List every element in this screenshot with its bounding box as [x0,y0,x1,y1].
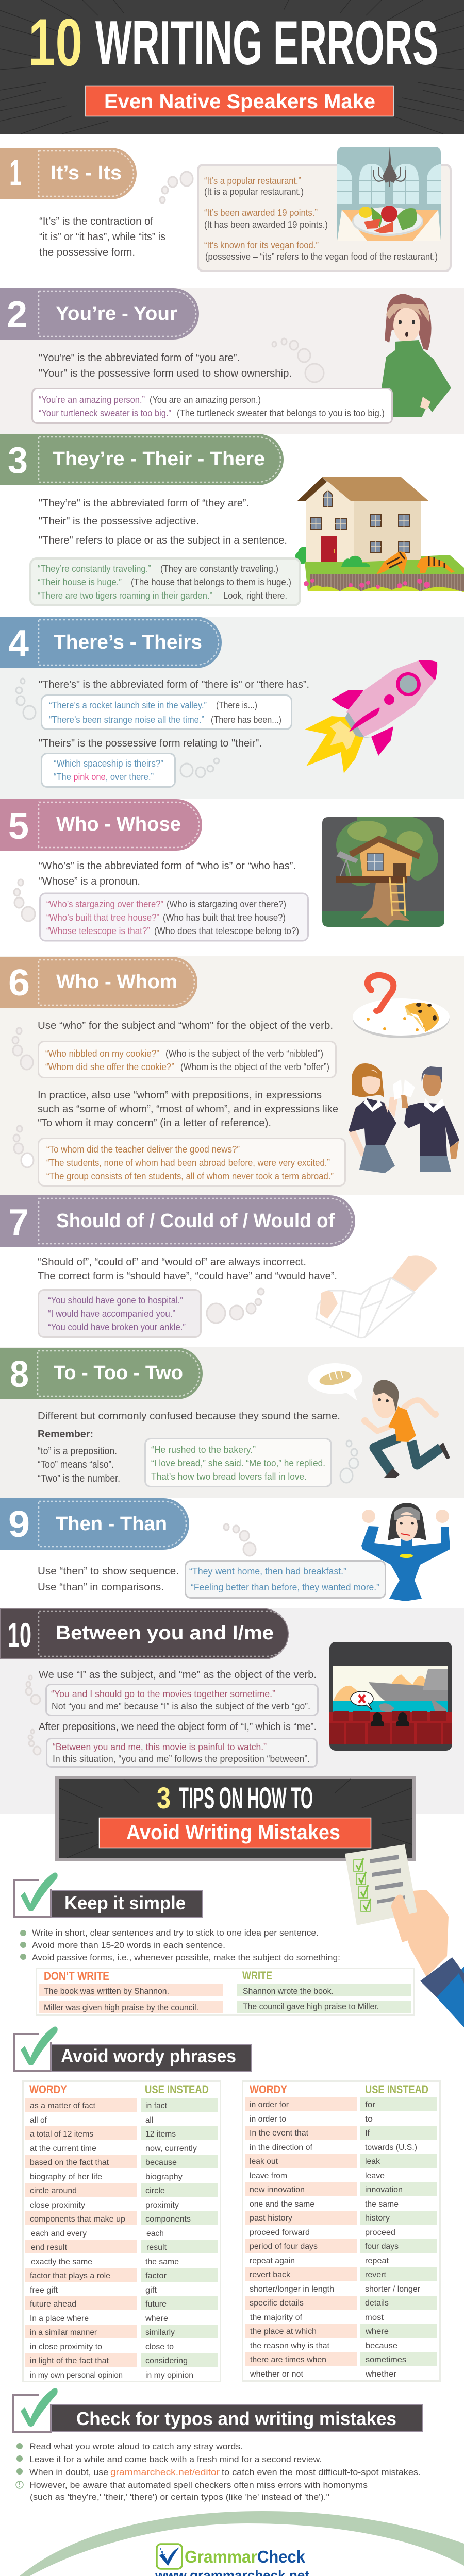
example box: “Your turtleneck sweater is too big.” [39,408,171,418]
example box 2: “The group consists of ten students, all of whom never took a term abroad.” [46,1171,334,1181]
example box: there's: “There’s been strange noise all the time.” [49,715,204,725]
explanation text [39,498,287,546]
bullet list: Avoid more than 15-20 words in each sentence. [32,1940,225,1950]
tag: 5 Who - Whose [0,799,202,851]
subtitle banner [86,86,393,116]
example box: “They went home, then had breakfast.” [189,1566,346,1577]
table: wordy phrases left: a total of 12 items [30,2130,93,2139]
example box 1: “You and I should go to the movies together sometime.” [51,1689,275,1699]
table: wordy phrases right: shorter/longer in length [250,2285,334,2294]
example box: “Who’s stargazing over there?” [46,899,163,909]
example box: “You’re an amazing person.” [39,395,145,405]
explanation text 2: After prepositions, we need the object form of “I,” which is “me”. [39,1721,317,1733]
table: wordy phrases left: factor that plays a role [30,2272,110,2280]
tag: 9 Then - Than: 9 [8,1504,30,1545]
example box: Look, right there. [223,590,287,601]
table: don't write / write: The book was written by Shannon. [44,1986,169,1996]
panel: error 5 [0,799,444,941]
panel: error 9 [0,1498,450,1601]
logo: GrammarCheck: Check [257,2547,306,2566]
example box: there's: (There has been...) [211,715,281,725]
explanation: there's: "There’s" is the abbreviated form of "there is" or “there has”. [39,679,309,690]
tag: 2 You're - Your [0,288,199,340]
table: wordy phrases left: gift [145,2286,157,2295]
heading [52,2405,423,2432]
heading [52,1890,202,1917]
explanation text: “Should of”, “could of” and “would of” are always incorrect. [38,1257,306,1268]
example box: (Who does that telescope belong to?) [154,926,299,936]
table: wordy phrases right: whether [365,2370,397,2379]
example box 2: In this situation, “you and me” follows the preposition “between”. [53,1754,310,1764]
tag: 8 To - Too - Two [0,1348,203,1399]
explanation text: "Your" is the possessive form used to show ownership. [39,368,292,379]
example box: there's: (There is...) [216,700,257,710]
tag: 1 It's - Its: It’s - Its [51,162,122,184]
explanation text [38,1257,337,1282]
tips header panel [55,1776,416,1861]
example box [30,558,300,605]
table: wordy phrases right: there are times when [250,2355,326,2364]
tag: 10 Between you and I/me [1,1609,289,1659]
illustration: house and tigers [295,477,464,592]
table: wordy phrases left: factor [145,2272,167,2280]
table: wordy phrases left: future [145,2300,167,2309]
explanation text [38,1411,340,1484]
table: wordy phrases right: revert [365,2270,387,2279]
illustration: speech bubble with bread [308,1363,362,1401]
explanation text: Use “then” to show sequence. [38,1566,179,1577]
explanation text: "Their" is the possessive adjective. [39,516,199,527]
example box 2: “Between you and me, this movie is painful to watch.” [53,1742,267,1752]
example box: (Who is stargazing over there?) [167,899,286,909]
example box: “They’re constantly traveling.” [38,564,151,574]
table: wordy phrases right: repeat [365,2257,389,2265]
table: don't write / write: DON’T WRITE [44,1970,109,1982]
example box 1: (Who is the subject of the verb “nibbled”) [165,1048,323,1059]
heading: Avoid wordy phrases [61,2045,236,2066]
table: wordy phrases right: innovation [365,2185,403,2194]
table: wordy phrases right [242,2081,440,2381]
table: wordy phrases left: result [146,2243,167,2252]
example box: “I love bread,” she said. “Me too,” he replied. [151,1458,325,1468]
example box: “There are two tigers roaming in their garden.” [38,590,212,601]
table: wordy phrases right: the reason why is that [250,2342,330,2350]
tag: 2 You're - Your: You’re - Your [56,303,177,325]
example box: (Who has built that tree house?) [163,912,286,923]
tag: 8 To - Too - Two: 8 [10,1354,29,1395]
table: wordy phrases right: period of four days [250,2242,318,2251]
tag: 2 You're - Your: 2 [7,294,27,335]
example box: (It is a popular restaurant.) [204,187,304,197]
table: wordy phrases left: similarly [145,2328,175,2337]
explanation text: Different but commonly confused because they sound the same. [38,1411,340,1422]
table: wordy phrases right: in the direction of [250,2143,313,2152]
illustration: cookie plate [353,975,450,1038]
example box: (The house that belongs to them is huge.) [131,577,291,587]
example box 1: (Whom is the object of the verb “offer”) [180,1062,329,1072]
tag: 6 Who - Whom: 6 [8,962,30,1004]
tag: 6 Who - Whom [0,957,197,1008]
bullet list [16,2442,421,2502]
tag: 10 Between you and I/me: Between you and I/me [56,1622,274,1644]
table: wordy phrases right: leave [365,2172,385,2180]
table: wordy phrases left: considering [145,2357,188,2365]
table: wordy phrases right: for [365,2100,376,2109]
example box [38,1290,201,1337]
explanation text: Use “than” in comparisons. [38,1582,164,1593]
table: wordy phrases left: in fact [145,2102,168,2110]
explanation text: "They’re" is the abbreviated form of “they are”. [39,498,249,509]
tip 1: keep it simple [14,1872,415,2015]
explanation text: the possessive form. [39,247,135,258]
table: wordy phrases left: 12 items [145,2130,176,2139]
example box: “Whose telescope is that?” [46,926,150,936]
panel: error 7 [0,1195,437,1338]
illustration: running man [361,1380,450,1478]
table: don't write / write: Miller was given high praise by the council. [44,2003,198,2012]
explanation text 1: We use “I” as the subject, and “me” as the object of the verb. [39,1669,317,1681]
explanation text: “Two” is the number. [38,1473,120,1484]
table: wordy phrases left: based on the fact that [30,2158,109,2167]
explanation text: “It’s” is the contraction of [39,216,153,227]
thought bubbles [16,679,219,777]
table: wordy phrases left [23,2081,221,2381]
explanation text: “Who’s” is the abbreviated form of “who is” or “who has”. [39,860,296,872]
table: wordy phrases left: because [145,2158,177,2167]
example box 2: “The students, none of whom had been abroad before, were very excited.” [46,1158,330,1168]
table: wordy phrases right: the same [365,2200,399,2209]
table: wordy phrases left: close to [145,2343,174,2351]
header panel [0,0,464,134]
example box 2 [46,1738,317,1767]
illustration: tree house [322,817,444,927]
table: wordy phrases right: the majority of [250,2313,303,2322]
bullet list: When in doubt, use [29,2467,108,2477]
panel: error 6 [0,957,459,1186]
example box: (The turtleneck sweater that belongs to you is too big.) [177,408,385,418]
tag: 7 Should of / Could of / Would of: 7 [8,1202,29,1243]
title number: 10 [28,5,82,80]
example box: (It has been awarded 19 points.) [204,219,328,230]
table: wordy phrases right: USE INSTEAD [365,2083,428,2096]
thought bubbles [14,879,35,921]
thought bubbles [207,1289,264,1323]
illustration: bandaged arm [316,1255,437,1338]
table: wordy phrases left: In a place where [30,2314,89,2323]
tip 3: check for typos [13,2388,423,2502]
tag: 9 Then - Than: Then - Than [56,1513,167,1535]
example box: (You are an amazing person.) [150,395,261,405]
explanation text: The correct form is “should have”, “could have” and “would have”. [38,1270,337,1282]
example box 1: “Whom did she offer the cookie?” [45,1062,174,1072]
example box: theirs: “Which spaceship is theirs?” [54,758,163,769]
explanation text 1: Use “who” for the subject and “whom” for the object of the verb. [38,1020,333,1031]
table: wordy phrases right: four days [365,2242,399,2251]
table: don't write / write: Shannon wrote the book. [243,1986,334,1996]
table: wordy phrases left: all of [30,2116,47,2125]
section backgrounds [0,288,464,1814]
bullet list: However, be aware that automated spell checkers often miss errors with homonyms [29,2480,368,2490]
illustration: cinema [329,1642,452,1751]
table: wordy phrases right: proceed forward [250,2228,310,2237]
tips number: 3 [157,1782,171,1815]
tag: 3 They're - Their - There: They’re - Their - There [53,448,265,470]
table: wordy phrases right: where [365,2327,389,2336]
table: wordy phrases left: in light of the fact that [30,2357,109,2365]
example box [145,1438,331,1487]
explanation text 2: In practice, also use “whom” with prepositions, in expressions [38,1090,322,1101]
table: wordy phrases left: WORDY [29,2083,67,2096]
table: wordy phrases right: leak out [250,2157,278,2166]
heading: Check for typos and writing mistakes [76,2408,396,2429]
explanation text 2: “To whom it may concern” (in a letter of reference). [38,1117,271,1129]
example box: “He rushed to the bakery.” [151,1445,256,1455]
table: wordy phrases right: history [365,2214,390,2223]
example box 1 [38,1042,336,1078]
explanation text [39,352,292,379]
subtitle banner: Even Native Speakers Make [104,91,375,113]
explanation text 2 [38,1090,338,1129]
table: wordy phrases right: leave from [250,2172,287,2180]
table: don't write / write [36,1968,415,2015]
table: wordy phrases left: where [145,2314,168,2323]
example box: (They are constantly traveling.) [160,564,278,574]
tips title: TIPS ON HOW TO [179,1782,313,1815]
bullet list [20,1928,340,1962]
table: wordy phrases right: shorter / longer [365,2285,421,2294]
example box: “It’s known for its vegan food.” [204,240,319,250]
table: wordy phrases right: most [365,2313,384,2322]
table: wordy phrases right: to [365,2115,373,2124]
example box: That’s how two bread lovers fall in love. [151,1471,307,1482]
illustration: rocket [305,660,437,773]
table: wordy phrases left: proximity [145,2201,179,2210]
table: wordy phrases right: past history [250,2214,292,2223]
explanation text 2: such as “some of whom”, “most of whom”, and in expressions like [38,1104,338,1115]
table: wordy phrases left: in a similar manner [30,2328,97,2337]
explanation text: “to” is a preposition. [38,1446,117,1457]
table: wordy phrases left: the same [145,2258,179,2266]
table: wordy phrases right: leak [365,2157,380,2166]
example box: “It’s been awarded 19 points.” [204,208,318,218]
tag: 4 There's - Theirs [0,617,222,668]
example box 2 [38,1139,345,1186]
illustration: restaurant [337,147,441,241]
panel: error 10 [1,1609,452,1767]
tag: 5 Who - Whose: 5 [8,806,29,847]
table: wordy phrases left: future ahead [30,2300,76,2309]
example box: (possessive – “its” refers to the vegan food of the restaurant.) [205,251,438,262]
icon: check box [13,2388,58,2432]
example box: “Their house is huge.” [38,577,122,587]
example box: “Feeling better than before, they wanted more.” [191,1582,379,1592]
table: don't write / write: The council gave high praise to Miller. [243,2002,379,2011]
table: wordy phrases left: all [145,2116,153,2125]
illustration: strong woman [361,1503,450,1601]
tag: 10 Between you and I/me: 10 [8,1616,31,1654]
tag: 6 Who - Whom: Who - Whom [56,971,177,993]
example box: there's [41,696,292,730]
illustration: surprised woman [382,294,451,417]
bullet list: to catch even the most difficult-to-spot mistakes. [222,2467,421,2477]
table: wordy phrases left: circle around [30,2187,77,2195]
tag: 4 There's - Theirs: 4 [8,623,29,664]
footer swoosh [0,2511,464,2576]
example box [32,388,392,423]
example box: “Who’s built that tree house?” [46,912,159,923]
explanation text: Remember: [38,1429,93,1440]
bullet list: Avoid passive forms, i.e., whenever possible, make the subject do something: [32,1953,340,1962]
explanation text [39,860,296,887]
example box 2: “To whom did the teacher deliver the good news?” [46,1144,240,1155]
table: wordy phrases right: sometimes [366,2355,406,2364]
table: wordy phrases left: biography [145,2173,183,2181]
logo wordmark: Grammar [185,2547,257,2566]
example box: “I would have accompanied you.” [48,1309,175,1319]
table: wordy phrases right: details [365,2299,389,2308]
table: wordy phrases left: circle [145,2187,165,2195]
table: wordy phrases left: exactly the same [31,2258,92,2266]
explanation text: “Whose” is a pronoun. [39,876,140,887]
tag: 7 Should of / Could of / Would of: Should of / Could of / Would of [56,1210,335,1232]
heading: Keep it simple [64,1892,186,1913]
thought bubbles [12,1028,34,1167]
table: wordy phrases right: new innovation [250,2185,305,2194]
table: wordy phrases left: components that make up [30,2215,125,2224]
thought bubbles [224,1524,256,1556]
table: wordy phrases left: as a matter of fact [30,2102,96,2110]
table: wordy phrases right: the place at which [250,2327,317,2336]
explanation text: "You’re" is the abbreviated form of “you are”. [39,352,240,364]
table: wordy phrases left: free gift [30,2286,58,2295]
panel: error 2 [0,288,451,423]
thought bubbles [26,1675,41,1755]
tag: 1 It's - Its [0,148,137,199]
table: wordy phrases right: repeat again [250,2257,295,2265]
example box [198,165,451,271]
explanation text [38,1566,179,1593]
table: wordy phrases right: If [365,2129,370,2138]
explanation text: “it is” or “it has”, while “its” is [39,231,165,243]
bullet list: Leave it for a while and come back with a fresh mind for a second review. [29,2454,322,2464]
tips banner: Avoid Writing Mistakes [126,1821,340,1844]
logo: GrammarCheck [155,2544,309,2576]
table: wordy phrases right: because [366,2342,397,2350]
explanation text [39,216,165,258]
explanation text: “Too” means “also”. [38,1459,114,1470]
table: wordy phrases right: whether or not [250,2370,304,2379]
bullet list: Read what you wrote aloud to catch any stray words. [29,2442,243,2451]
tag: 7 Should of / Could of / Would of [0,1195,355,1247]
tips banner [99,1818,371,1848]
example box: theirs: “The pink one, over there.” [54,772,154,782]
icon: check box [14,2026,58,2071]
tag: 1 It's - Its: 1 [9,152,22,194]
bullet list: (such as 'they’re,' 'their,' 'there') or certain typos (like 'he' instead of 'the')." [30,2492,329,2502]
table: wordy phrases right: In the event that [250,2129,309,2138]
example box [40,893,308,941]
table: wordy phrases left: in my opinion [145,2371,193,2380]
tag: 9 Then - Than [0,1498,189,1550]
table: wordy phrases right: revert back [250,2270,291,2279]
table: wordy phrases left: each and every [31,2229,87,2238]
table: wordy phrases right: towards (U.S.) [365,2143,417,2152]
table: don't write / write: WRITE [242,1969,272,1982]
panel: error 3 [0,434,464,605]
thought bubbles [272,338,324,382]
panel: error 4 [0,617,437,787]
example box: “It’s a popular restaurant.” [204,176,301,186]
bullet list: Write in short, clear sentences and try to stick to one idea per sentence. [32,1928,319,1938]
example box: “You should have gone to hospital.” [48,1295,183,1306]
thought bubbles [160,172,193,203]
table: wordy phrases left: close proximity [30,2201,85,2210]
illustration: checklist in hand [345,1844,464,2027]
tag: 8 To - Too - Two: To - Too - Two [54,1362,183,1384]
table: wordy phrases left: each [146,2229,164,2238]
example box: theirs [41,753,175,787]
table: wordy phrases right: one and the same [250,2200,314,2209]
table: wordy phrases right: WORDY [250,2083,287,2096]
illustration: two students [349,1063,459,1173]
table: wordy phrases right: in order to [250,2115,286,2124]
example box [186,1561,386,1598]
tag: 3 They're - Their - There: 3 [8,440,28,481]
explanation text: "There" refers to place or as the subject in a sentence. [39,535,287,546]
example box: there's: “There’s a rocket launch site in the valley.” [49,700,207,710]
table: wordy phrases right: specific details [250,2299,304,2308]
example box 1: Not “you and me” because “I” is also the subject of the verb “go”. [52,1701,310,1711]
table: wordy phrases left: now, currently [145,2144,197,2153]
logo icon [157,2544,182,2569]
tag: 5 Who - Whose: Who - Whose [56,814,181,835]
tip 2: avoid wordy phrases [14,2026,440,2381]
table: wordy phrases left: at the current time [30,2144,96,2153]
table: wordy phrases left: biography of her life [30,2173,102,2181]
example box 1 [46,1685,318,1716]
table: wordy phrases left: components [145,2215,191,2224]
table: wordy phrases left: in my own personal opinion [30,2371,123,2380]
panel: error 1 [0,147,451,271]
table: wordy phrases left: end result [31,2243,68,2252]
table: wordy phrases right: in order for [250,2100,289,2109]
bullet list: grammarcheck.net/editor [110,2467,220,2477]
tag: 4 There's - Theirs: There’s - Theirs [54,632,202,653]
thought bubbles [340,1440,358,1483]
icon: check box [14,1872,58,1917]
tag: 3 They're - Their - There [0,434,284,485]
table: wordy phrases left: in close proximity to [30,2343,102,2351]
example box: “You could have broken your ankle.” [48,1322,186,1332]
table: wordy phrases left: USE INSTEAD [145,2083,209,2096]
table: wordy phrases right: proceed [365,2228,395,2237]
panel: error 8 [0,1348,450,1487]
explanation: theirs: "Theirs" is the possessive form relating to "their". [39,738,262,749]
example box 1: “Who nibbled on my cookie?” [45,1048,159,1059]
